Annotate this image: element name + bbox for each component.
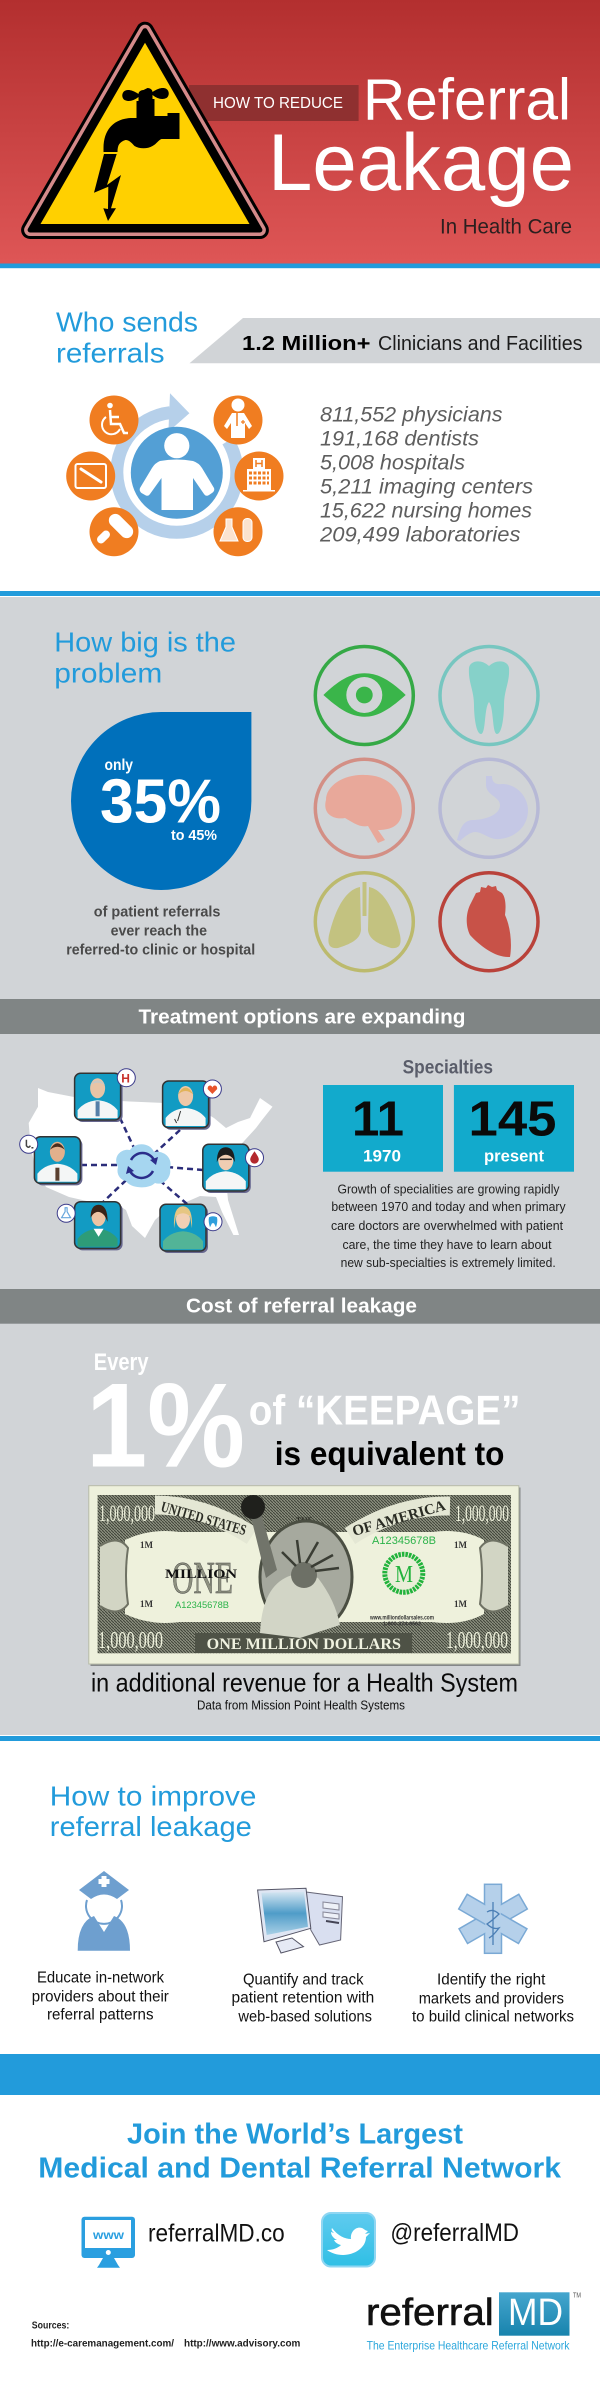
heading [54,627,236,689]
stat: 11 in 1970: 1970 [363,1147,401,1166]
doctor tile: flask [57,1202,123,1250]
doctor tile: stethoscope [20,1135,82,1185]
icon: stomach [440,759,538,857]
step: identify: Identify the right [437,1971,546,1988]
sources: http://e-caremanagement.com/ [31,2338,174,2350]
heading bar: cost of referral leakage [0,1289,600,1324]
million dollar bill: A12345678B [175,1600,229,1610]
engraved text [98,1498,509,1654]
heading: referral leakage [50,1811,252,1842]
dashed connectors [81,1118,203,1205]
banner: clinicians count: 1.2 Million+ [242,333,370,355]
step: educate: referral patterns [47,2006,154,2023]
statement: Every [94,1349,149,1376]
label: how to reduce: HOW TO REDUCE [213,95,343,112]
million dollar bill: 1-800-374-8562 [383,1622,421,1628]
statement: of “KEEPAGE” [249,1386,521,1433]
stat drop: 35 percent: 35% [100,768,221,837]
seal: M [395,1562,413,1588]
doctor tile: hospital: H [121,1071,130,1085]
step: quantify: patient retention with [232,1989,374,2006]
heading bar: cost of referral leakage: Cost of referral leakage [186,1296,417,1318]
referralMD logo: The Enterprise Healthcare Referral Network [367,2338,570,2352]
referralMD logo: MD [508,2292,563,2334]
twitter link [322,2213,519,2266]
engraved text: 1M [454,1540,468,1550]
subtitle: In Health Care [440,215,572,238]
list of referrer counts: 191,168 dentists [320,428,480,451]
panel: specialties [323,1057,574,1270]
list of referrer counts: 209,499 laboratories [319,524,521,547]
statement: 1% [86,1359,245,1493]
icon: flask and test tube [214,507,262,556]
panel: cost of leakage [86,1349,520,1712]
icon: pills [90,507,138,556]
list of referrer counts [319,404,534,547]
stat caption: ever reach the [111,923,207,940]
engraved text: THE [296,1516,313,1525]
engraved text: 1,000,000 [455,1501,509,1526]
panel: how to improve [32,1781,574,2025]
stat caption: referred-to clinic or hospital [66,942,255,959]
revenue caption: in additional revenue for a Health System [91,1668,518,1698]
step: quantify: Quantify and track [243,1971,364,1988]
icon: lungs [315,873,413,971]
doctor tile: blood drop [203,1144,264,1193]
paragraph: care, the time they have to learn about [342,1237,552,1252]
heading: referrals [56,338,164,369]
heading [56,307,198,369]
doctor tile: tooth [160,1204,222,1253]
icon: nurse [78,1871,130,1951]
title: Leakage [268,118,574,208]
stat drop: 35 percent: only [104,757,133,774]
step: identify: markets and providers [419,1990,564,2007]
icon: warning triangle with leaking tap [30,31,260,230]
url: referralMD.co [148,2220,285,2248]
heading: Specialties [403,1057,493,1078]
engraved text: UNITED STATES [159,1499,248,1539]
panel: how big is the problem [54,627,538,971]
handle: @referralMD [390,2219,519,2247]
engraved text: 1M [454,1599,468,1609]
divider bar [0,591,600,596]
stat: 145 present: 145 [468,1093,556,1147]
list of referrer counts: 811,552 physicians [320,404,503,427]
panel: who sends referrals [56,307,600,556]
seal [385,1554,423,1592]
paragraph: between 1970 and today and when primary [331,1199,566,1214]
step: educate: providers about their [32,1988,169,2005]
cloud hub [116,1144,171,1187]
statement: is equivalent to [275,1435,504,1472]
list of referrer counts: 5,008 hospitals [320,452,465,475]
heading: Who sends [56,307,198,338]
icon: referral cycle [66,393,284,556]
engraved text: OF AMERICA [351,1498,448,1540]
engraved text: ONE [172,1552,233,1603]
step: educate [32,1969,169,2023]
title [268,67,574,208]
map of the United States [29,1088,273,1238]
blue band [0,2054,600,2095]
header banner [0,0,600,268]
engraved text: 1,000,000 [98,1628,163,1654]
step: identify: to build clinical networks [412,2008,574,2025]
referralMD logo: TM [573,2292,581,2299]
engraved text: 1M [140,1599,154,1609]
heading bar: treatment options: Treatment options are expanding [138,1006,466,1028]
paragraph: Growth of specialities are growing rapidly [338,1181,560,1196]
icon: heart [440,873,538,971]
icon: monitor: www [92,2228,125,2242]
label: how to reduce [189,85,359,121]
paragraph: care doctors are overwhelmed with patient [331,1218,563,1233]
heading: problem [54,658,162,689]
stat drop: 35 percent [71,712,251,890]
step: educate: Educate in-network [37,1969,164,1986]
doctor tile: hospital [75,1069,135,1122]
statement [86,1349,520,1493]
engraved text: ONE MILLION DOLLARS [207,1636,401,1653]
list of referrer counts: 5,211 imaging centers [320,476,534,499]
sources: Sources: [32,2320,69,2332]
icon: doctor [214,396,262,444]
panel: treatment options network map [20,1069,273,1253]
engraved text: 1,000,000 [446,1628,508,1654]
website link [82,2217,285,2268]
call to action heading [38,2118,562,2184]
paragraph: new sub-specialties is extremely limited. [341,1255,556,1270]
million dollar bill: www.milliondollarsales.com [369,1615,434,1621]
icon: twitter bird [322,2213,375,2266]
step: quantify [232,1971,374,2025]
heading: How big is the [54,627,236,658]
step: identify [412,1971,574,2025]
banner: clinicians count [190,318,600,363]
icon: hospital [234,452,284,500]
statue of liberty [241,1495,352,1638]
banner: clinicians count: Clinicians and Facilities [378,333,582,355]
million dollar bill: A12345678B [372,1535,436,1547]
heading bar: treatment options [0,999,600,1034]
sources: http://www.advisory.com [184,2338,300,2350]
engraved text: 1M [140,1540,154,1550]
section backgrounds [0,268,600,1735]
icon: brain [315,759,413,857]
stat caption: of patient referrals [94,904,220,921]
paragraph [331,1181,566,1270]
icon: computer [258,1888,342,1953]
referralMD logo [366,2292,581,2352]
stat caption [66,904,255,959]
stat: 11 in 1970 [323,1085,443,1172]
stat: 145 present: present [484,1147,544,1166]
title: Referral [363,67,571,132]
doctor tile: heart [163,1080,221,1130]
icon: eye [315,646,413,744]
sources [31,2320,300,2350]
heading [50,1781,256,1842]
icon: monitor [82,2217,135,2268]
million dollar bill [89,1486,521,1666]
call to action heading: Join the World’s Largest [127,2118,463,2150]
icon: tooth [440,646,538,744]
icon: x-ray bone [66,452,115,500]
referralMD logo: referral [366,2292,494,2334]
call to action heading: Medical and Dental Referral Network [38,2152,562,2184]
divider bar [0,1736,600,1741]
icon: star of life [459,1884,527,1953]
engraved text: MILLION [165,1566,238,1581]
engraved text: 1,000,000 [99,1501,155,1526]
icon: wheelchair [90,396,138,444]
stat drop: 35 percent: to 45% [171,827,217,844]
data source: Data from Mission Point Health Systems [197,1698,405,1712]
list of referrer counts: 15,622 nursing homes [320,500,533,523]
stat: 11 in 1970: 11 [352,1093,404,1147]
heading: How to improve [50,1781,256,1812]
step: quantify: web-based solutions [237,2008,372,2025]
stat: 145 present [454,1085,574,1172]
